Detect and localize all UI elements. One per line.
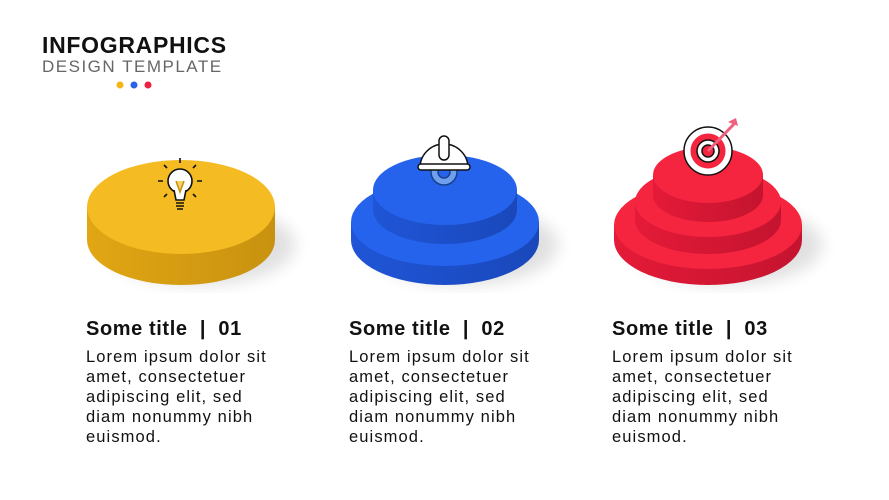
column 1: Some title | 01 — [86, 318, 242, 340]
subtitle: DESIGN TEMPLATE — [42, 57, 223, 76]
column 1 — [86, 318, 267, 446]
dots — [116, 82, 152, 88]
pedestals — [87, 118, 825, 290]
column 1: diam nonummy nibh — [86, 408, 253, 426]
column 3: Lorem ipsum dolor sit — [612, 348, 793, 366]
column 3: amet, consectetuer — [612, 368, 772, 386]
shadows — [105, 205, 822, 285]
column 1: Lorem ipsum dolor sit — [86, 348, 267, 366]
pedestal blue — [351, 155, 539, 285]
column 2: diam nonummy nibh — [349, 408, 516, 426]
column 2: Lorem ipsum dolor sit — [349, 348, 530, 366]
column 1: euismod. — [86, 428, 162, 446]
column 3: Some title | 03 — [612, 318, 768, 340]
column 2: adipiscing elit, sed — [349, 388, 506, 406]
icon: light bulb — [158, 158, 202, 209]
column 3: diam nonummy nibh — [612, 408, 779, 426]
column 2: Some title | 02 — [349, 318, 505, 340]
column 2: amet, consectetuer — [349, 368, 509, 386]
icon: hard hat gear — [418, 136, 470, 185]
column 3: euismod. — [612, 428, 688, 446]
icon: target with arrow — [684, 118, 738, 175]
column 1: adipiscing elit, sed — [86, 388, 243, 406]
column 2 — [349, 318, 530, 446]
column 2: euismod. — [349, 428, 425, 446]
column 3: adipiscing elit, sed — [612, 388, 769, 406]
column 3 — [612, 318, 793, 446]
title: INFOGRAPHICS — [42, 32, 227, 58]
pedestal yellow — [87, 160, 275, 285]
column 1: amet, consectetuer — [86, 368, 246, 386]
pedestal red — [614, 147, 802, 285]
